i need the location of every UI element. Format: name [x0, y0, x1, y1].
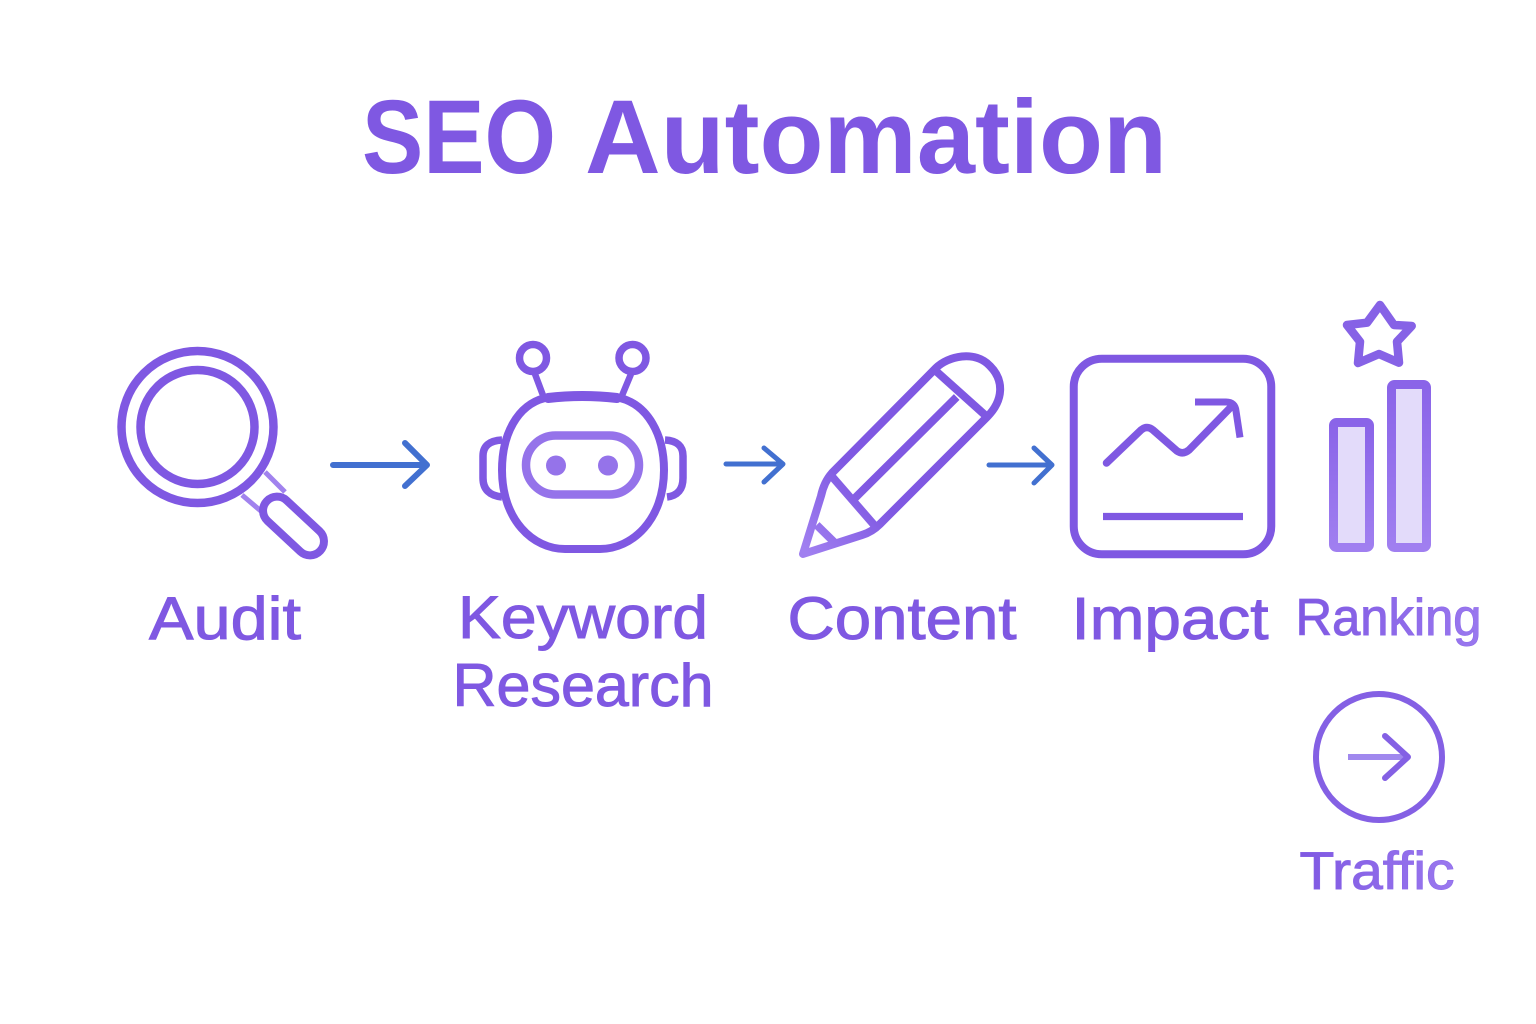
label: keyword research: Research [452, 652, 714, 719]
icon: circle arrow [1316, 694, 1442, 820]
icon: pencil [803, 356, 1000, 554]
arrow: keyword research to content [726, 448, 783, 482]
step: impact [1072, 359, 1271, 652]
label: content: Content [788, 585, 1017, 652]
label: traffic: Traffic [1300, 842, 1454, 901]
title: Automation [585, 79, 1167, 196]
title: SEO [362, 79, 556, 196]
step: keyword research [452, 344, 714, 719]
label: impact: Impact [1072, 586, 1268, 652]
icon: magnifying glass [122, 351, 330, 561]
step: traffic [1300, 694, 1454, 901]
step: content [788, 356, 1017, 652]
label: keyword research: Keyword [458, 584, 708, 651]
arrow: content to impact [989, 448, 1052, 483]
arrow: audit to keyword research [333, 443, 427, 486]
icon: line chart [1074, 359, 1271, 554]
step: ranking [1296, 305, 1482, 647]
icon: star [1347, 305, 1412, 363]
icon: bars [1334, 384, 1426, 548]
icon: robot [483, 344, 683, 549]
step: audit [122, 351, 330, 652]
label: ranking: Ranking [1296, 589, 1482, 647]
label: audit: Audit [149, 585, 301, 652]
